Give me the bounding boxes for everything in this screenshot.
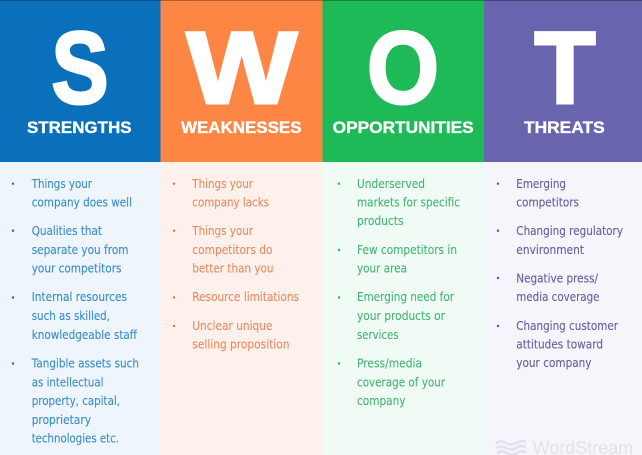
- heading: threats: THREATS: [524, 118, 605, 137]
- list: strengths: [0, 162, 161, 455]
- list: opportunities: your products or: [357, 309, 445, 323]
- list: strengths: as intellectual: [32, 376, 104, 390]
- logo: WordStream watermark: [496, 438, 633, 455]
- list: strengths: proprietary: [32, 413, 91, 427]
- header: opportunities: [322, 0, 484, 162]
- panel: weaknesses: [160, 0, 322, 455]
- list: opportunities: Emerging need for: [357, 290, 454, 304]
- list: weaknesses: Things your: [191, 224, 253, 238]
- header: threats: [484, 0, 642, 162]
- list: strengths: Tangible assets such: [31, 356, 139, 370]
- heading: opportunities: OPPORTUNITIES: [333, 118, 474, 137]
- list: weaknesses: Things your: [191, 177, 253, 191]
- letter T: T: [534, 11, 596, 125]
- list: weaknesses: better than you: [192, 262, 274, 276]
- list: opportunities: markets for specific: [357, 196, 460, 210]
- list: threats: environment: [516, 243, 584, 257]
- list: strengths: Things your: [31, 177, 92, 191]
- letter S: S: [52, 11, 108, 125]
- list: weaknesses: Resource limitations: [192, 290, 299, 304]
- list: strengths: knowledgeable staff: [32, 328, 138, 342]
- list: opportunities: Underserved: [357, 177, 425, 191]
- list: weaknesses: competitors do: [192, 243, 272, 257]
- heading: weaknesses: WEAKNESSES: [181, 118, 302, 137]
- list: threats: attitudes toward: [516, 338, 603, 352]
- list: weaknesses: company lacks: [192, 196, 269, 210]
- list: strengths: Qualities that: [32, 224, 102, 238]
- header: weaknesses: [160, 0, 322, 162]
- letter O: O: [367, 11, 439, 125]
- list: weaknesses: selling proposition: [192, 338, 290, 352]
- list: threats: Negative press/: [516, 272, 599, 286]
- heading: strengths: STRENGTHS: [27, 118, 132, 137]
- list: threats: competitors: [516, 196, 579, 210]
- list: strengths: company does well: [32, 196, 132, 210]
- list: opportunities: [322, 162, 484, 455]
- list: threats: your company: [516, 356, 592, 370]
- list: opportunities: company: [357, 394, 406, 408]
- list: opportunities: your area: [357, 262, 407, 276]
- header: strengths: [0, 0, 161, 162]
- list: threats: Emerging: [516, 177, 566, 191]
- list: threats: Changing customer: [516, 319, 618, 333]
- list: strengths: Internal resources: [32, 290, 127, 304]
- list: opportunities: Few competitors in: [357, 243, 457, 257]
- panel: threats: [484, 0, 642, 455]
- list: weaknesses: Unclear unique: [192, 319, 272, 333]
- panel: opportunities: [322, 0, 484, 455]
- list: opportunities: services: [357, 328, 398, 342]
- list: opportunities: coverage of your: [357, 376, 445, 390]
- list: threats: Changing regulatory: [516, 224, 623, 238]
- list: threats: media coverage: [516, 290, 600, 304]
- list: opportunities: Press/media: [357, 356, 422, 370]
- letter W: W: [186, 11, 298, 125]
- list: strengths: your competitors: [32, 262, 122, 276]
- list: opportunities: products: [357, 214, 404, 228]
- list: strengths: such as skilled,: [32, 309, 110, 323]
- icon: waves: [496, 441, 526, 454]
- panel: strengths: [0, 0, 161, 455]
- list: strengths: property, capital,: [32, 394, 120, 408]
- list: weaknesses: [160, 162, 322, 455]
- list: threats: [484, 162, 642, 455]
- list: strengths: technologies etc.: [32, 432, 119, 446]
- list: strengths: separate you from: [32, 243, 129, 257]
